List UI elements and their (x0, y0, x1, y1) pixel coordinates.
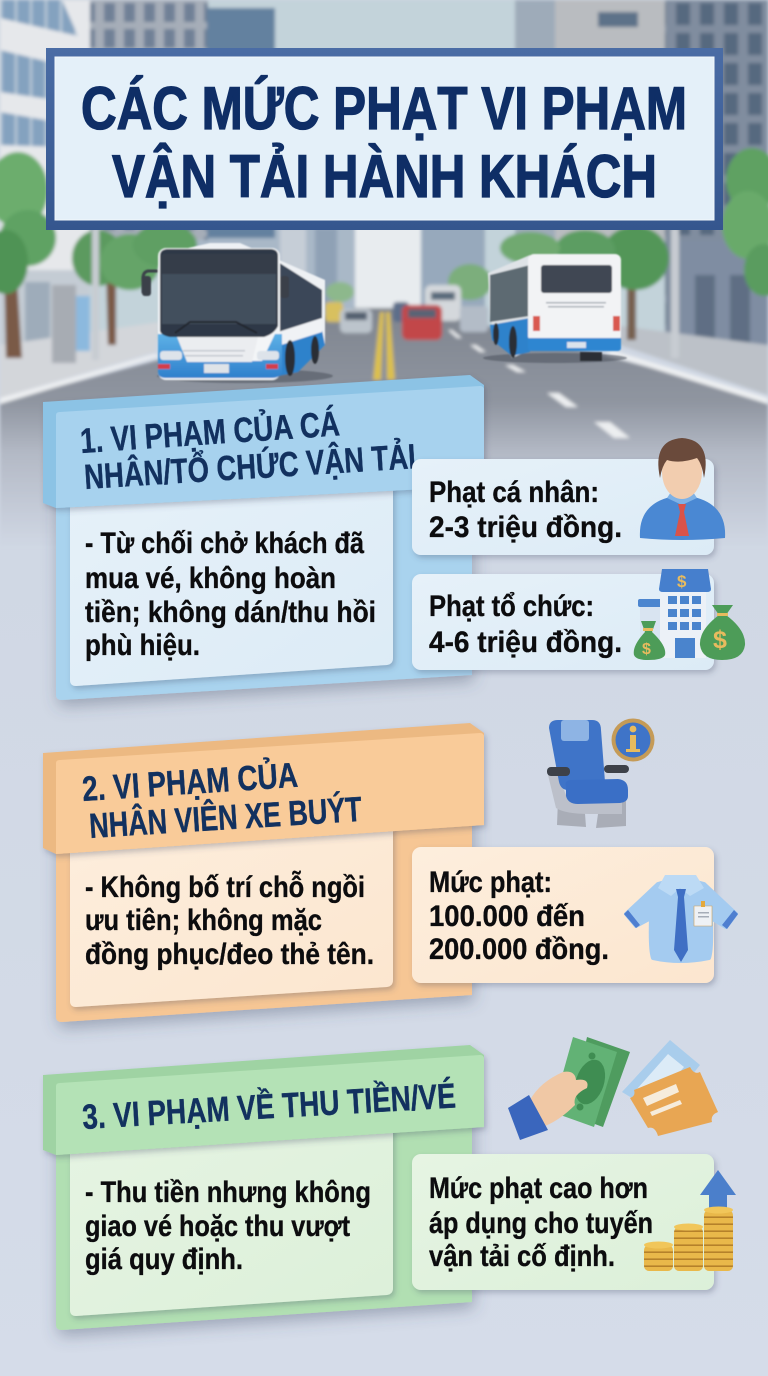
title board (46, 48, 723, 230)
card: organisation fine: Phạt tổ chức: (429, 590, 594, 623)
header text: 2. VI PHẠM CỦA (81, 755, 299, 809)
card: individual fine: 2-3 triệu đồng. (429, 511, 622, 544)
card: higher fine: áp dụng cho tuyến (429, 1207, 653, 1240)
description text: - Không bố trí chỗ ngồi (85, 870, 365, 904)
icon: building with money bags (634, 569, 745, 660)
distant buildings left (0, 0, 355, 350)
description text: tiền; không dán/thu hồi (85, 596, 376, 629)
bus front left (142, 243, 333, 383)
road (0, 308, 768, 545)
icon: person (640, 438, 725, 540)
trees (0, 148, 768, 358)
header text: NHÂN VIÊN XE BUÝT (88, 789, 363, 846)
back panel (56, 1100, 472, 1330)
description text (85, 870, 374, 971)
card: higher fine: Mức phạt cao hơn (429, 1172, 648, 1205)
pavements (0, 322, 160, 398)
lane dashes (505, 365, 526, 372)
card: staff fine: 200.000 đồng. (429, 933, 609, 966)
inner description card (70, 470, 393, 686)
icon: uniform shirt (624, 875, 738, 962)
header text (81, 755, 363, 846)
card: higher fine (412, 1154, 714, 1290)
panel: section 1 (43, 375, 745, 700)
card: organisation fine: 4-6 triệu đồng. (429, 626, 622, 659)
header tab (43, 723, 484, 854)
inner description card (70, 1110, 393, 1316)
street scene background (0, 0, 768, 545)
card: higher fine: vận tải cố định. (429, 1240, 615, 1273)
icon: tickets (622, 1040, 718, 1136)
far haze (355, 225, 421, 320)
bus stop (52, 285, 76, 363)
description text: - Từ chối chở khách đã (85, 527, 364, 560)
header text: 1. VI PHẠM CỦA CÁ (79, 403, 341, 461)
description text: mua vé, không hoàn (85, 562, 336, 595)
icon: hand with cash (508, 1037, 630, 1140)
cars (325, 285, 488, 340)
title text: VẬN TẢI HÀNH KHÁCH (112, 143, 657, 210)
panel: section 2 (43, 718, 738, 1022)
header tab (43, 375, 484, 508)
header text: NHÂN/TỔ CHỨC VẬN TẢI (83, 436, 417, 497)
icon: coin stacks (644, 1206, 733, 1271)
card: organisation fine (412, 574, 714, 670)
description text: đồng phục/đeo thẻ tên. (85, 938, 374, 971)
description text (85, 527, 376, 662)
icon: info badge (612, 718, 654, 762)
description text: - Thu tiền nhưng không (85, 1176, 371, 1209)
card: staff fine: Mức phạt: (429, 866, 552, 899)
description text: ưu tiên; không mặc (85, 904, 322, 937)
distant buildings right (420, 0, 768, 350)
centre double line (373, 312, 384, 380)
sign posts (92, 228, 99, 360)
panel: section 3 (43, 1037, 736, 1330)
road edge lines (0, 354, 160, 404)
icon: building with money bags: $ (677, 572, 687, 591)
description text: phù hiệu. (85, 629, 200, 662)
header tab (43, 1045, 484, 1155)
description text: giá quy định. (85, 1243, 243, 1276)
bus rear right (483, 254, 627, 363)
header text (79, 403, 417, 497)
icon: building with money bags: $ (642, 641, 651, 658)
description text (85, 1176, 371, 1276)
card: individual fine (412, 459, 714, 555)
icon: building with money bags: $ (713, 626, 727, 654)
icon: rising arrow (700, 1170, 736, 1212)
card: staff fine (412, 847, 714, 983)
header text: 3. VI PHẠM VỀ THU TIỀN/VÉ (81, 1076, 457, 1137)
inner description card (70, 810, 393, 1007)
card: staff fine: 100.000 đến (429, 900, 585, 933)
description text: giao vé hoặc thu vượt (85, 1210, 350, 1243)
back panel (56, 450, 472, 700)
back panel (56, 790, 472, 1022)
icon: seat (547, 720, 629, 828)
title text (81, 75, 687, 210)
card: individual fine: Phạt cá nhân: (429, 476, 599, 509)
